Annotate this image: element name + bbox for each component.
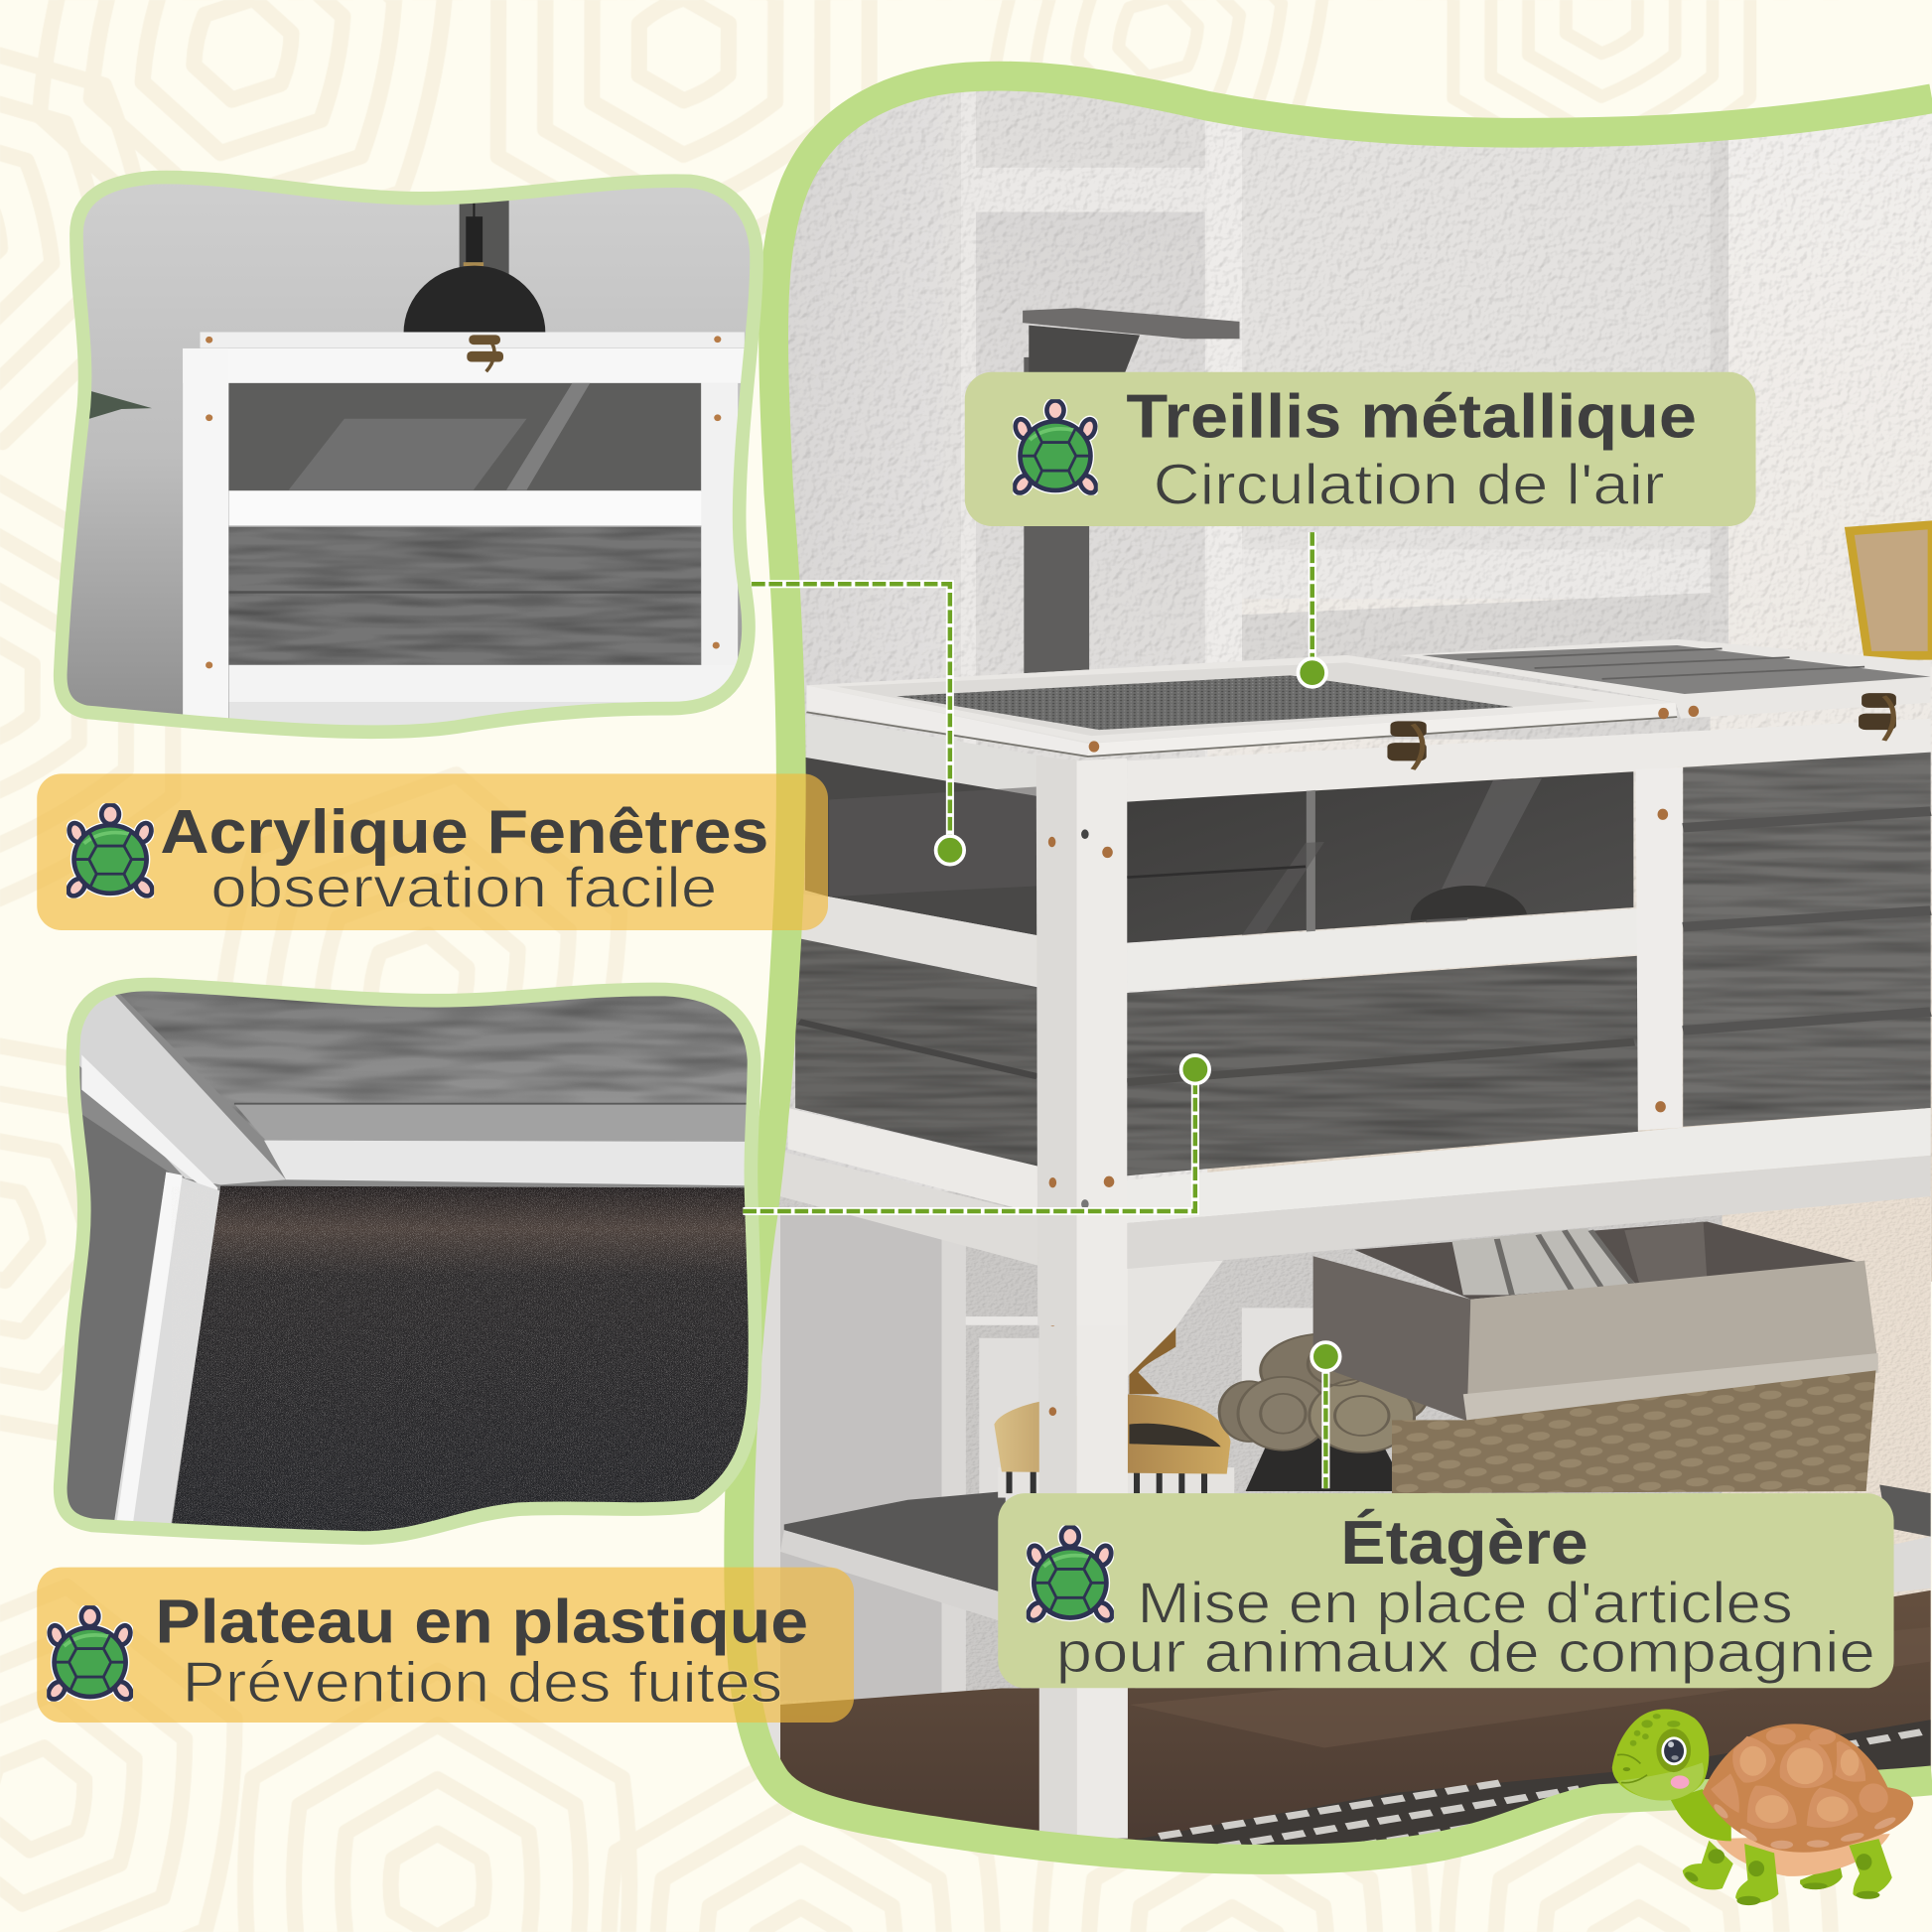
turtle front legs [1683, 1839, 1892, 1903]
inset border [61, 178, 757, 732]
inset white frame [55, 992, 773, 1540]
black textured tray [169, 1186, 773, 1546]
connector: shelf [1311, 1342, 1340, 1488]
heading: Treillis métallique [1126, 383, 1697, 452]
icon: turtle [65, 804, 156, 899]
side acrylic window [805, 758, 1037, 935]
inset acrylic window [229, 383, 701, 490]
connector: plastic tray [743, 1055, 1209, 1211]
floor [780, 1590, 1931, 1856]
inset left panel [55, 1096, 169, 1540]
inset lid [200, 332, 745, 347]
panel: inset photo of acrylic window [51, 164, 790, 751]
callout: Acrylique Fenêtres [37, 773, 828, 930]
turtle back leg [1800, 1863, 1843, 1889]
inset upper wood [114, 989, 773, 1144]
hutch brace and legs [1038, 1199, 1223, 1839]
right wood panel [1683, 753, 1931, 1127]
callout: Plateau en plastique [37, 1568, 854, 1723]
right lid [1400, 639, 1931, 719]
wooden dowels [1048, 706, 1699, 1209]
panel: main product photo [724, 50, 1932, 1856]
front left post [1036, 756, 1127, 1325]
turtle leg spots [1683, 1849, 1879, 1905]
grey lower shelf [780, 1484, 1931, 1622]
panel: inset photo of plastic tray [49, 969, 778, 1552]
flower bouquet and vase [1219, 1333, 1430, 1491]
front mid rail [1127, 908, 1643, 992]
hutch upper body [780, 639, 1931, 1325]
heading: Acrylique Fenêtres [160, 798, 768, 867]
inset dowels [206, 336, 721, 668]
middle post [1636, 767, 1682, 1131]
grey post and bracket [1023, 308, 1240, 678]
callout: Treillis métallique [965, 372, 1756, 526]
gold and striped container [994, 1320, 1234, 1498]
turtle plastron [1716, 1834, 1890, 1876]
storage basket with books [1313, 1222, 1878, 1493]
wall [740, 50, 1932, 1282]
tray inset border [61, 985, 756, 1538]
turtle neck [1670, 1789, 1731, 1841]
icon: turtle [1012, 400, 1099, 496]
main photo green border [739, 76, 1932, 1860]
subheading line 1: Mise en place d'articles [1138, 1571, 1793, 1635]
side mid rail [795, 894, 1037, 986]
front top rail [1127, 719, 1931, 802]
subheading line 2: pour animaux de compagnie [1056, 1620, 1875, 1685]
lower scene: under the hutch [724, 1182, 1931, 1856]
connector: metal mesh [1298, 532, 1326, 687]
front wood panel [1127, 956, 1638, 1175]
turtle head [1612, 1709, 1709, 1801]
icon: turtle [45, 1606, 135, 1703]
turtle shell [1703, 1724, 1913, 1853]
connector: acrylic window [752, 584, 964, 865]
leaf [86, 390, 152, 420]
side rail [806, 714, 1037, 796]
brass latches [1387, 693, 1896, 769]
side wood panel [795, 937, 1037, 1167]
icon: turtle [1025, 1527, 1116, 1623]
callout: Étagère [998, 1493, 1894, 1688]
inset wood panel [229, 527, 701, 664]
front acrylic window [1127, 771, 1633, 943]
heading: Étagère [1340, 1508, 1588, 1578]
subheading: Circulation de l'air [1154, 454, 1665, 517]
rug [1129, 1720, 1931, 1856]
lower wall [754, 1215, 1312, 1700]
left lid with metal mesh [806, 655, 1677, 757]
front bottom rail [1127, 1108, 1931, 1223]
illustration: cartoon turtle [1612, 1709, 1913, 1905]
subheading: Prévention des fuites [183, 1651, 782, 1715]
side bottom rails [788, 1108, 1037, 1213]
heading: Plateau en plastique [155, 1587, 808, 1656]
inset mid rail [229, 490, 701, 525]
black pendant lamp [404, 200, 545, 333]
subheading: observation facile [210, 856, 717, 919]
gold picture frame [1850, 525, 1932, 655]
inset latch [467, 335, 503, 371]
inset frame [183, 348, 746, 737]
